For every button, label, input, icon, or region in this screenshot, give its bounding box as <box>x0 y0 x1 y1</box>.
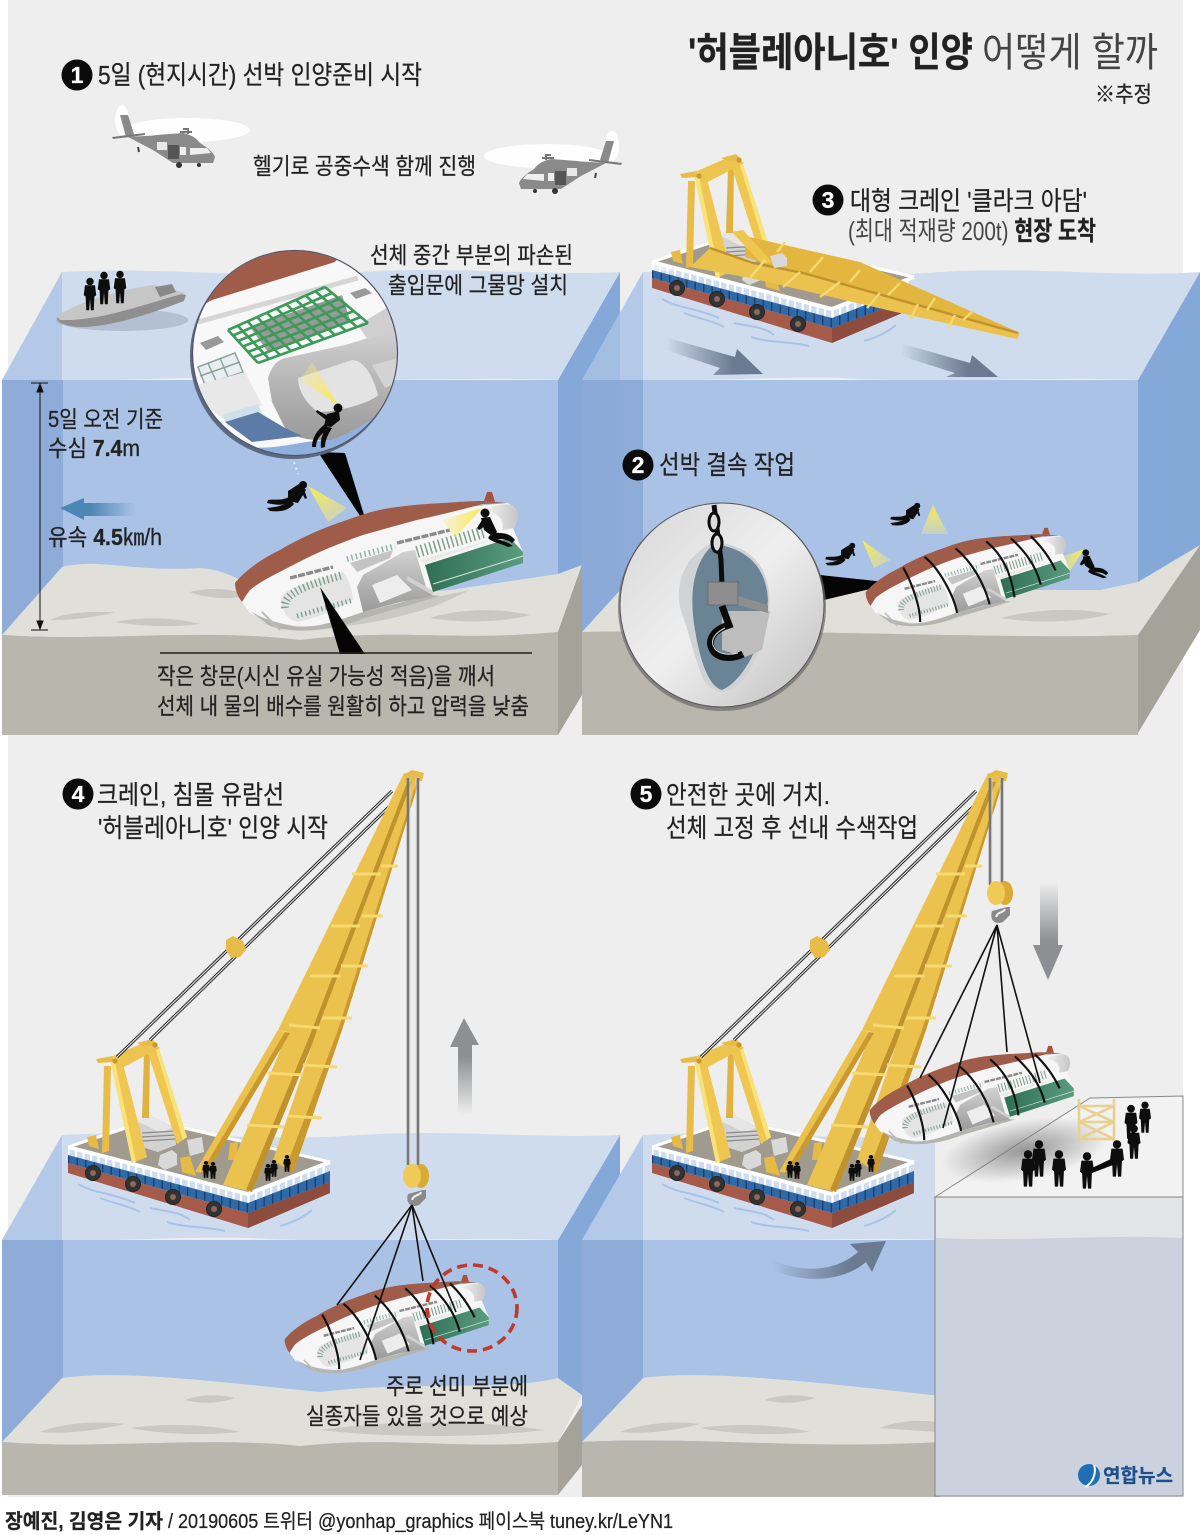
callout rule <box>160 652 532 654</box>
step 1 heading: 1 <box>71 62 84 88</box>
pointer: magnifier to strap <box>820 575 895 600</box>
step 1 heading: 5일 (현지시간) 선박 인양준비 시작 <box>98 60 422 90</box>
pointer: to small window <box>320 587 365 654</box>
hoist cable and hook, step 5 <box>920 778 1040 1128</box>
step 2 heading: 선박 결속 작업 <box>659 450 795 480</box>
subtitle: how to lift: 어떻게 할까 <box>982 31 1158 75</box>
step 3 heading <box>812 184 1096 246</box>
label: break small windows: 작은 창문(시신 유실 가능성 적음)을 깨서 <box>157 663 495 689</box>
step 5 heading: 안전한 곳에 거치. <box>666 780 830 810</box>
magnifier: net on door <box>190 250 402 470</box>
icon: support boat with crew <box>56 271 188 331</box>
footer credit: / 20190605 트위터 @yonhap_graphics 페이스북 tuney.kr/LeYN1 <box>168 1510 673 1533</box>
arrow: lifting up <box>450 1018 479 1115</box>
divers around strapped ship <box>825 503 1108 578</box>
step 3 heading: 3 <box>822 187 834 213</box>
step 5 heading <box>630 778 918 843</box>
panel: step 1 water block <box>2 270 620 735</box>
step 2 heading: 2 <box>632 452 644 478</box>
diver with torch on ship <box>442 508 515 547</box>
panel: step 2 water block <box>582 270 1200 735</box>
label: water depth: 수심 7.4m <box>48 435 140 461</box>
step 4 heading: 크레인, 침몰 유람선 <box>97 780 284 810</box>
marker: stern dashed circle <box>427 1265 517 1351</box>
rescue workers on quay <box>1021 1102 1151 1189</box>
label: break small windows <box>157 663 529 719</box>
arrow: barge moving right <box>901 344 998 377</box>
quay block <box>935 1096 1183 1496</box>
label: missing persons expected at stern <box>306 1373 528 1429</box>
illustration: ship over quay <box>870 1046 1074 1144</box>
diver with torch, left of ship <box>267 462 347 522</box>
step 5 heading: 5 <box>640 781 653 807</box>
arrow: current direction <box>60 498 135 520</box>
step 3: barge with crane lying flat <box>652 154 1020 346</box>
step 5 heading: 선체 고정 후 선내 수색작업 <box>666 813 918 843</box>
step 3 heading: 대형 크레인 '클라크 아담' <box>850 186 1087 216</box>
pointer: magnifier to ship <box>318 452 368 528</box>
crane barge, swinging <box>652 770 1008 1231</box>
title: '허블레아니호' 인양 <box>688 31 973 75</box>
label: net on damaged door: 선체 중간 부분의 파손된 <box>370 242 573 268</box>
crane barge, lifting <box>68 770 424 1231</box>
label: net on damaged door: 출입문에 그물망 설치 <box>388 272 568 298</box>
label: helicopter search: 헬기로 공중수색 함께 진행 <box>253 153 476 179</box>
illustration: ship being lifted <box>285 1275 489 1373</box>
illustration: sunken ship <box>235 492 523 631</box>
label: water depth: 5일 오전 기준 <box>48 406 163 432</box>
arrow: barge moving left <box>666 338 763 375</box>
icon: helicopter left <box>112 105 250 168</box>
magnifier: chain hook <box>618 503 826 711</box>
footer credit: 장예진, 김영은 기자 <box>5 1510 163 1533</box>
label: net on damaged door <box>370 242 573 298</box>
label: water depth <box>48 406 163 461</box>
label: missing persons expected at stern: 실종자들 있을 것으로 예상 <box>306 1403 528 1429</box>
arrow: swing to shore <box>772 1241 886 1279</box>
illustration: strapped ship on seabed <box>866 528 1070 626</box>
label: current speed: 유속 4.5㎞/h <box>48 524 162 550</box>
footer credit <box>5 1510 673 1533</box>
note: estimate: ※추정 <box>1095 82 1152 107</box>
scaffold on quay <box>1079 1099 1114 1141</box>
hoist cable and hook <box>337 778 456 1360</box>
step 2 heading <box>622 450 795 480</box>
step 3 heading: (최대 적재량 200t) 현장 도착 <box>848 216 1096 246</box>
step 4 heading <box>62 778 328 843</box>
logo: Yonhap News: 연합뉴스 <box>1103 1465 1173 1487</box>
icon: helicopter right <box>484 131 622 194</box>
logo: Yonhap News <box>1078 1464 1173 1487</box>
arrow: lowering down <box>1033 882 1063 980</box>
panel: step 4 water block <box>2 1133 620 1495</box>
step 4 heading: 4 <box>72 781 85 807</box>
panel: step 5 water block <box>582 1133 942 1497</box>
depth arrow <box>31 383 48 630</box>
step 4 heading: '허블레아니호' 인양 시작 <box>98 813 328 843</box>
label: break small windows: 선체 내 물의 배수를 원활히 하고 압력을 낮춤 <box>157 693 529 719</box>
label: missing persons expected at stern: 주로 선미 부분에 <box>386 1373 528 1399</box>
